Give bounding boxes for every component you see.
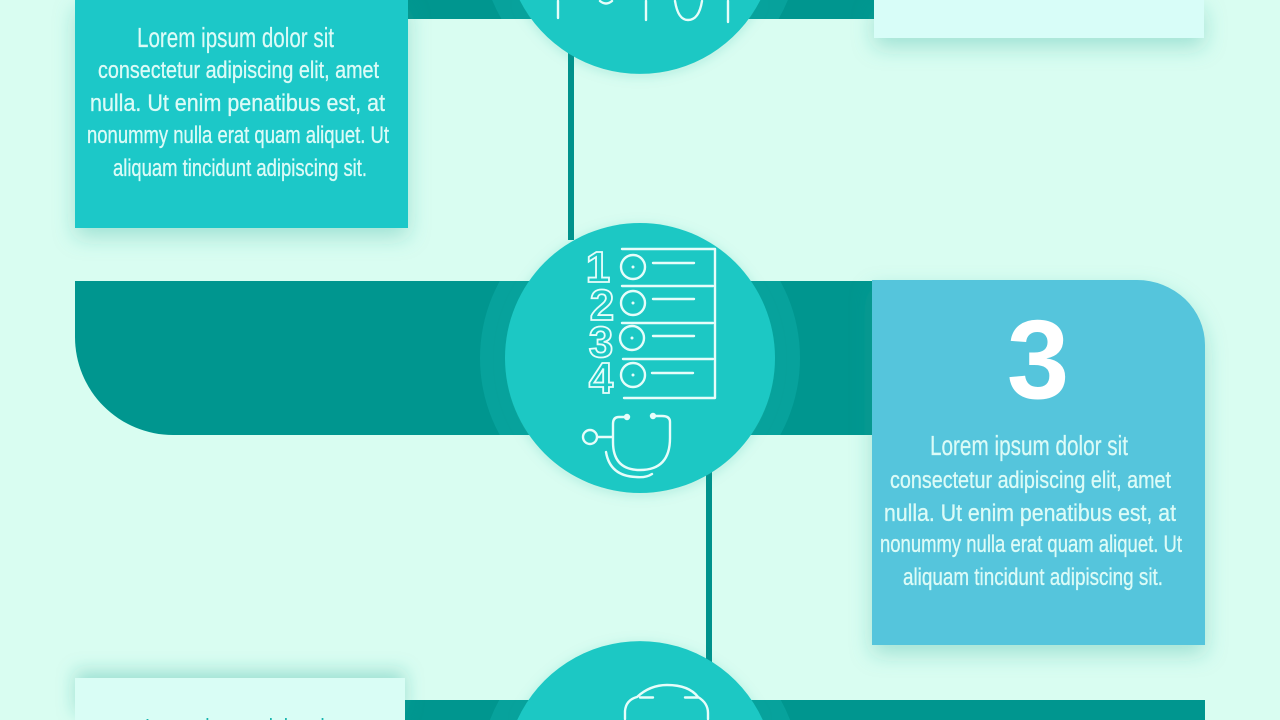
step 2 description: nulla. Ut enim penatibus est, at — [90, 90, 385, 117]
step 3 description: nonummy nulla erat quam aliquet. Ut — [880, 531, 1182, 558]
panel: top right light card — [874, 0, 1204, 38]
step 3 description: nulla. Ut enim penatibus est, at — [884, 500, 1176, 527]
icon: numbered checklist: 2 — [590, 281, 614, 330]
connector line: top circle to middle circle — [568, 50, 574, 240]
step 2 description: nonummy nulla erat quam aliquet. Ut — [87, 122, 389, 149]
circle: top step with icon — [520, 0, 760, 74]
step 2 description — [87, 22, 389, 182]
icon: head outline, cropped — [625, 685, 708, 719]
icon: numbered checklist — [586, 243, 715, 403]
icon: numbered checklist: 4 — [589, 354, 614, 403]
panel: step 3 card — [872, 280, 1205, 645]
step 3 description: consectetur adipiscing elit, amet — [890, 467, 1171, 494]
circle: middle step with checklist icon — [505, 223, 775, 493]
panel: bottom left light card — [75, 678, 405, 720]
circle: bottom step with head icon — [517, 641, 763, 720]
step number 3: 3 — [1007, 297, 1069, 422]
step 2 description: aliquam tincidunt adipiscing sit. — [113, 155, 367, 182]
step 2 description: Lorem ipsum dolor sit — [137, 22, 334, 53]
step 3 description: Lorem ipsum dolor sit — [930, 430, 1128, 461]
step 3 description: aliquam tincidunt adipiscing sit. — [903, 564, 1163, 591]
band: middle step — [75, 281, 872, 435]
panel: step 2 text card — [75, 0, 408, 228]
step 3 description — [880, 430, 1182, 591]
icon: numbered checklist: 3 — [589, 318, 613, 367]
icon: numbered checklist: 1 — [586, 243, 610, 292]
band: top step — [408, 0, 874, 19]
icon: stethoscope — [583, 414, 670, 477]
icon: top step, cropped — [558, 1, 728, 22]
connector line: middle circle to bottom circle — [706, 470, 712, 665]
step 2 description: consectetur adipiscing elit, amet — [98, 57, 379, 84]
band: bottom step — [405, 700, 1205, 720]
